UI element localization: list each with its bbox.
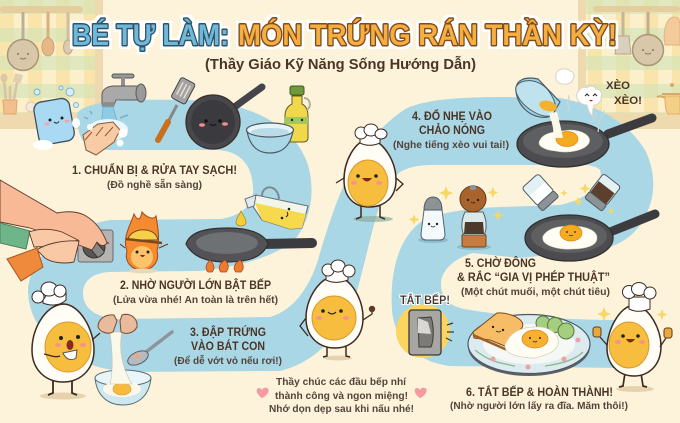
icon: steam cloud characters xyxy=(556,69,604,132)
step 4 text: 4. ĐỔ NHẸ VÀO xyxy=(412,110,492,123)
icon: pan on the flame xyxy=(186,228,312,272)
character: egg chef top xyxy=(336,124,403,222)
step 2 text: (Lửa vừa nhé! An toàn là trên hết) xyxy=(113,294,278,306)
icon: flame with helmet xyxy=(120,212,168,274)
step 5 text xyxy=(457,257,610,298)
icon: stove knob xyxy=(78,230,113,262)
step 2 text: 2. NHỜ NGƯỜI LỚN BẬT BẾP xyxy=(120,279,271,292)
icon: pan with seasoned egg xyxy=(525,214,655,261)
icon: spatula xyxy=(158,77,196,140)
icon: oil drop xyxy=(236,211,246,226)
sizzle label xyxy=(606,79,642,107)
character: egg chef middle xyxy=(300,260,375,360)
step 6 text xyxy=(450,386,628,412)
icon: cracking egg into bowl xyxy=(95,314,151,405)
subtitle: (Thầy Giáo Kỹ Năng Sống Hướng Dẫn) xyxy=(205,56,476,73)
icon: off switch xyxy=(396,304,454,358)
step 4 text: (Nghe tiếng xèo vui tai!) xyxy=(393,139,509,151)
step 3 text: VÀO BÁT CON xyxy=(191,340,265,353)
icon: pepper mill xyxy=(457,185,491,250)
winding blue path xyxy=(28,97,653,372)
icon: faucet and washing hands xyxy=(83,74,146,155)
icon: salt shaker with face xyxy=(418,197,448,243)
decorative sparkles xyxy=(408,183,615,225)
step 6 text: (Nhờ người lớn lấy ra đĩa. Măm thôi!) xyxy=(450,400,628,412)
panel: kitchen corner right xyxy=(578,0,680,129)
closing message xyxy=(269,376,414,415)
panel: kitchen corner left xyxy=(0,0,103,129)
sizzle label: XÈO xyxy=(606,79,630,92)
title: BÉ TỰ LÀM: xyxy=(72,18,229,52)
icon: breakfast plate xyxy=(468,313,590,376)
step 5 text: (Một chút muối, một chút tiêu) xyxy=(461,286,610,298)
title xyxy=(72,18,617,52)
character: surprised egg chef xyxy=(32,282,100,400)
icon: pan with frying egg xyxy=(517,118,652,167)
step 3 text: (Để dễ vớt vỏ nếu rơi!) xyxy=(174,354,282,367)
step 1 text xyxy=(72,164,237,191)
icon: spoon with eggshell xyxy=(125,332,172,368)
step 5 text: 5. CHỜ ĐÔNG xyxy=(465,257,536,270)
title: MÓN TRỨNG RÁN THẦN KỲ! xyxy=(238,18,617,52)
step 5 text: & RẮC “GIA VỊ PHÉP THUẬT” xyxy=(457,271,610,284)
character: happy egg chef xyxy=(593,282,672,392)
icon: oil jug pouring xyxy=(245,187,308,229)
icon: sponge xyxy=(33,86,80,150)
icon: heart left xyxy=(257,388,269,398)
step 3 text xyxy=(174,326,282,367)
step 3 text: 3. ĐẬP TRỨNG xyxy=(190,326,266,339)
icon: flying salt shaker xyxy=(522,173,559,211)
step 2 text xyxy=(113,279,278,306)
icon: heart right xyxy=(415,388,427,398)
closing message: thành công và ngon miệng! xyxy=(275,391,408,402)
step 1 text: (Đồ nghề sẵn sàng) xyxy=(107,178,202,191)
icon: oil bottle xyxy=(284,86,310,142)
step 1 text: 1. CHUẨN BỊ & RỬA TAY SẠCH! xyxy=(72,164,237,177)
step 4 text xyxy=(393,110,509,151)
icon: frying pan with face xyxy=(186,87,262,149)
icon: bowl tilted pouring egg xyxy=(516,78,563,138)
turn off label: TẮT BẾP! xyxy=(400,294,450,307)
step 4 text: CHẢO NÓNG xyxy=(419,124,485,137)
icon: empty bowl xyxy=(246,123,294,153)
icon: flying pepper shaker xyxy=(584,173,621,211)
step 6 text: 6. TẮT BẾP & HOÀN THÀNH! xyxy=(466,386,613,399)
icon: hands turning the stove on xyxy=(0,180,107,281)
closing message: Thầy chúc các đầu bếp nhí xyxy=(276,376,407,388)
closing message: Nhớ dọn dẹp sau khi nấu nhé! xyxy=(269,403,414,415)
sizzle label: XÈO! xyxy=(614,94,642,107)
